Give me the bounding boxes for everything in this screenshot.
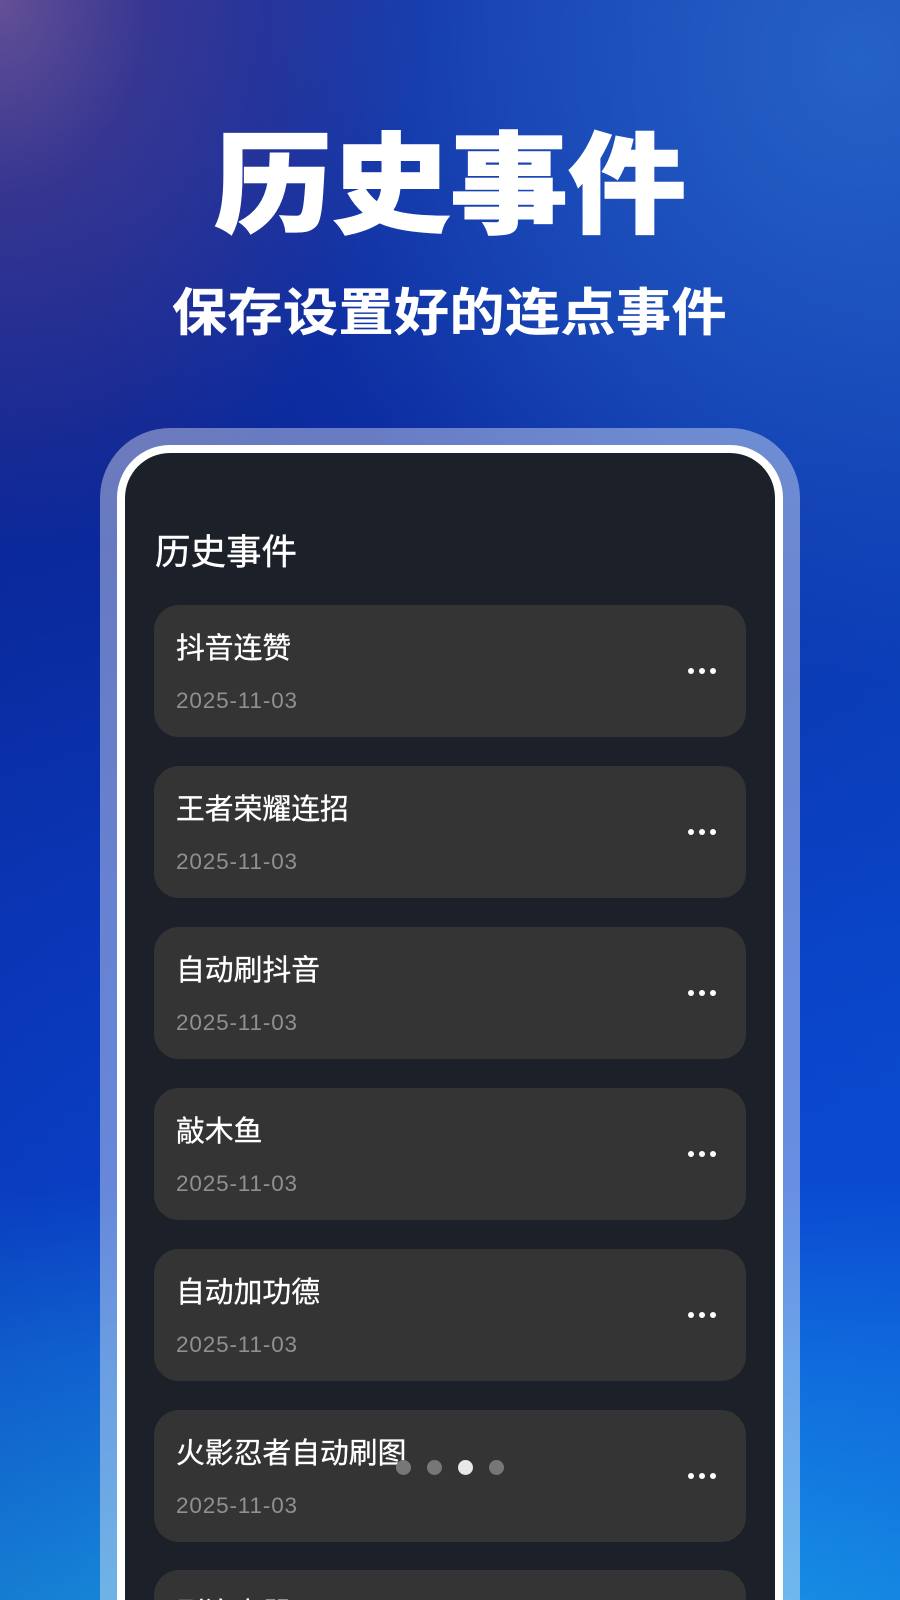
event date: 2025-11-03 [176, 1010, 298, 1035]
event date: 2025-11-03 [176, 688, 298, 713]
icon: more menu [688, 1473, 716, 1479]
event date: 2025-11-03 [176, 1493, 298, 1518]
pagination dots [396, 1460, 504, 1475]
icon: more menu [688, 1151, 716, 1157]
event date: 2025-11-03 [176, 1171, 298, 1196]
icon: more menu [688, 990, 716, 996]
card: 自动加功德 [154, 1249, 746, 1381]
card: 自动刷抖音 [154, 927, 746, 1059]
phone white border [117, 445, 783, 1600]
event date: 2025-11-03 [176, 1332, 298, 1357]
dot 1 [396, 1460, 411, 1475]
dot 3 active [458, 1460, 473, 1475]
screen heading: 历史事件 [155, 532, 297, 572]
subtitle: 保存设置好的连点事件 [172, 284, 727, 342]
event name: 王者荣耀连招 [176, 794, 349, 826]
title: 历史事件 [214, 126, 686, 248]
event name: 自动刷抖音 [176, 955, 320, 987]
card: partial bottom row [154, 1570, 746, 1600]
event name: 敲木鱼 [176, 1116, 262, 1148]
dot 4 [489, 1460, 504, 1475]
card: 抖音连赞 [154, 605, 746, 737]
event name: 自动加功德 [176, 1277, 320, 1309]
phone mockup [100, 428, 800, 1600]
event name: 抖音连赞 [176, 633, 291, 665]
dot 2 [427, 1460, 442, 1475]
icon: more menu [688, 829, 716, 835]
card: 王者荣耀连招 [154, 766, 746, 898]
event date: 2025-11-03 [176, 849, 298, 874]
phone screen [125, 453, 775, 1600]
icon: more menu [688, 668, 716, 674]
event name: 火影忍者自动刷图 [176, 1438, 406, 1470]
icon: more menu [688, 1312, 716, 1318]
card: 火影忍者自动刷图 [154, 1410, 746, 1542]
card: 敲木鱼 [154, 1088, 746, 1220]
